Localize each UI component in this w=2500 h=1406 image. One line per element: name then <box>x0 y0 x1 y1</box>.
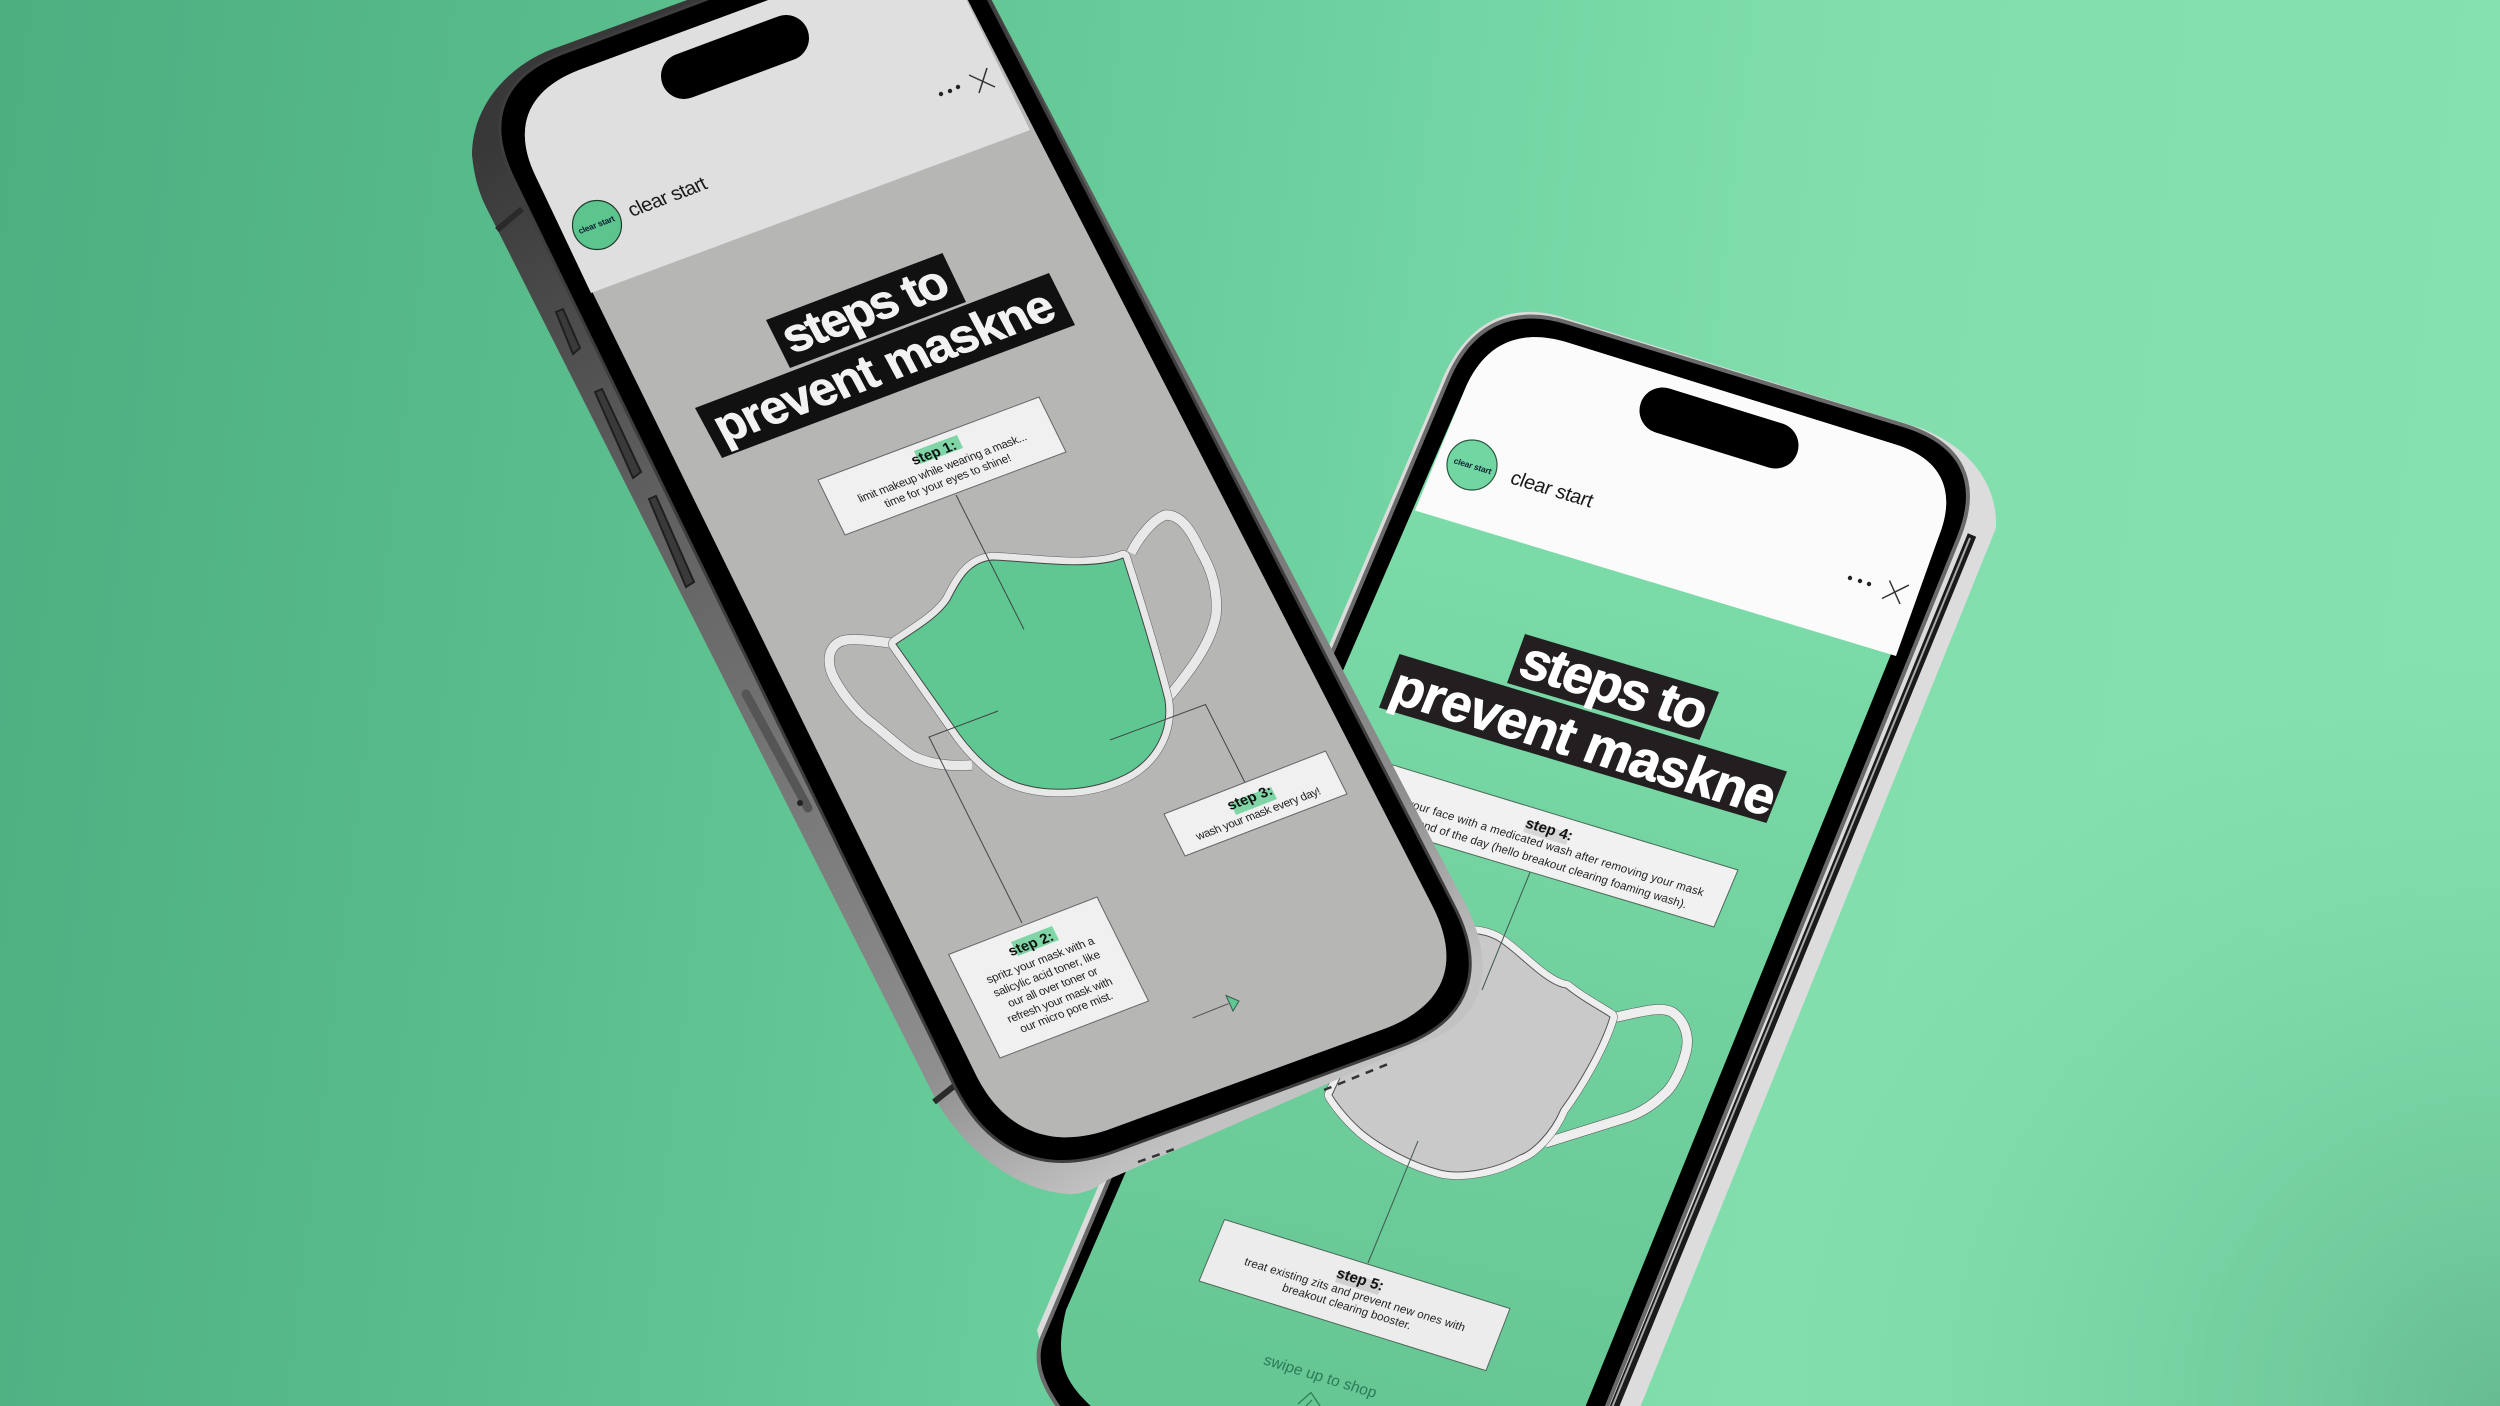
card: step 3: step 3: <box>1224 783 1276 814</box>
back phone bezel <box>1039 317 1968 1406</box>
back title: steps to <box>1512 630 1717 742</box>
sim tray <box>746 694 808 808</box>
back mask illustration <box>1332 933 1687 1172</box>
card: step 4 <box>1340 758 1738 927</box>
back connector lines <box>1368 871 1531 1263</box>
front phone screen <box>525 0 1446 1137</box>
card: step 2 <box>949 897 1149 1058</box>
card: step 1: limit makeup while wearing a mask... <box>856 432 1029 505</box>
front connector lines <box>929 495 1245 923</box>
back dynamic island <box>1662 410 1776 446</box>
front menu dots <box>939 85 960 96</box>
front mask illustration <box>829 515 1216 789</box>
card: step 4: step 4: <box>1523 815 1575 845</box>
front logo: clear start <box>576 214 617 236</box>
card: step 5: breakout clearing booster. <box>1280 1282 1413 1332</box>
side buttons <box>556 309 694 587</box>
front header band <box>525 0 1030 293</box>
card: step 2: spritz your mask with a <box>984 935 1097 986</box>
front close icon <box>969 68 995 93</box>
card: step 1 <box>818 397 1066 535</box>
front logo <box>572 200 622 250</box>
back phone silver body <box>1037 312 1996 1406</box>
card: step 1: time for your eyes to shine! <box>883 452 1014 510</box>
antenna bands <box>497 209 963 1102</box>
swipe up label: swipe up to shop <box>1261 1352 1379 1402</box>
front title: steps to <box>772 255 958 364</box>
front brand name: clear start <box>624 173 712 221</box>
speaker grill <box>1138 1062 1393 1162</box>
card: step 2: refresh your mask with <box>1005 976 1115 1026</box>
back title: prevent maskne <box>1383 656 1786 828</box>
card: step 5: step 5: <box>1334 1265 1386 1295</box>
arrow: next <box>1193 996 1239 1018</box>
card: step 2: our micro pore mist. <box>1018 990 1115 1035</box>
front phone body <box>472 0 1483 1194</box>
card: step 3: wash your mask every day! <box>1193 786 1323 843</box>
swipe up arrow icon <box>1298 1392 1320 1406</box>
back close icon <box>1882 580 1909 604</box>
card: step 5 <box>1199 1220 1510 1371</box>
front dynamic island <box>684 38 786 76</box>
back header band <box>1415 337 1946 656</box>
card: step 2: salicylic acid toner, like <box>991 949 1103 1000</box>
back menu dots <box>1848 576 1871 586</box>
card: step 3 <box>1164 751 1347 856</box>
phone: back right light phone <box>1037 312 1996 1406</box>
back logo: clear start <box>1452 456 1493 476</box>
card: step 4: wash your face with a medicated wash after removing your mask <box>1375 789 1706 899</box>
card: step 2: step 2: <box>1005 929 1057 960</box>
front title: prevent maskne <box>704 280 1064 453</box>
phone: front left dark phone <box>472 0 1483 1194</box>
front phone bezel <box>500 0 1470 1161</box>
card: step 4: at the end of the day (hello breakout clearing foaming wash). <box>1385 809 1689 911</box>
back phone screen <box>1061 337 1946 1406</box>
card: step 1: step 1: <box>908 438 960 469</box>
card: step 5: treat existing zits and prevent new ones with <box>1242 1256 1467 1334</box>
back logo <box>1447 440 1497 490</box>
back brand name: clear start <box>1507 467 1597 512</box>
card: step 2: our all over toner or <box>1006 966 1101 1010</box>
